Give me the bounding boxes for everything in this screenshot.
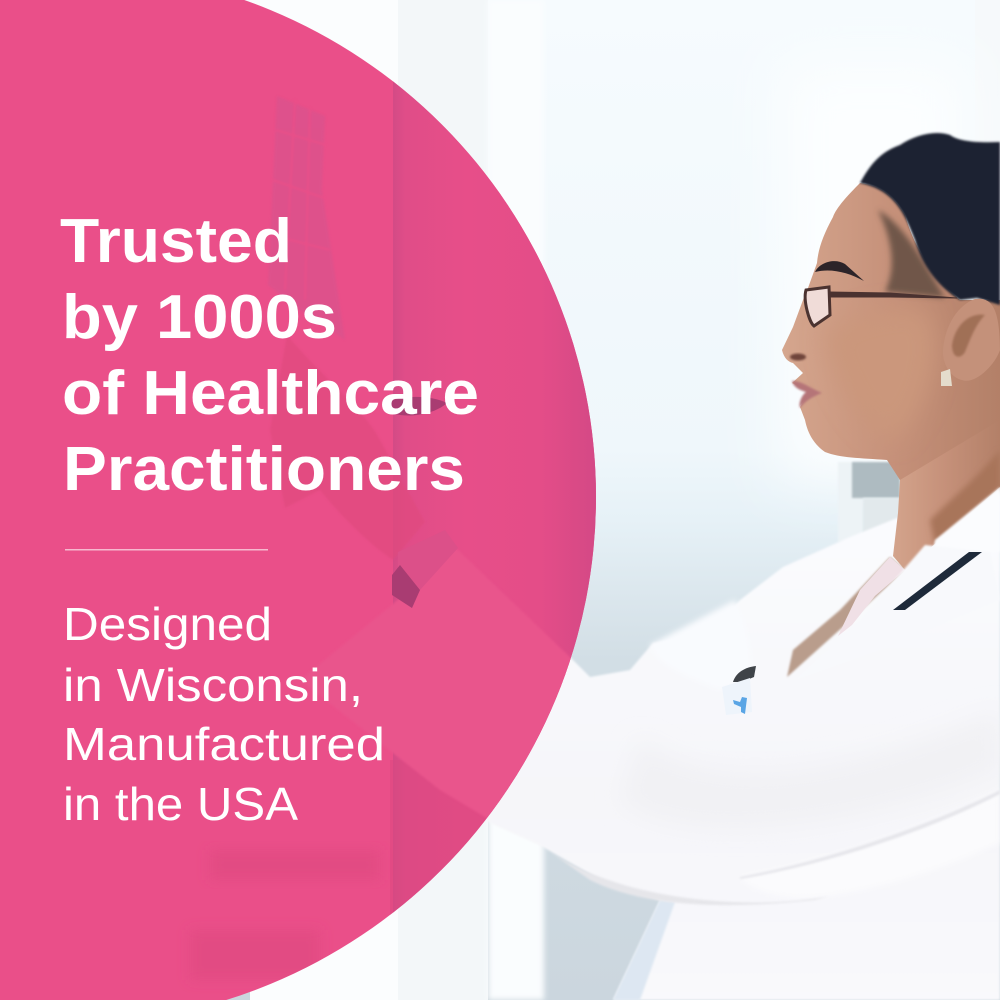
coat [350, 487, 1000, 1000]
heading: Practitioners [63, 435, 465, 504]
heading: of Healthcare [62, 359, 479, 428]
subheading: Designed [63, 598, 272, 650]
sleeve folds [740, 790, 1000, 898]
pink circle panel [0, 0, 596, 1000]
lanyard [893, 552, 982, 610]
earring [941, 369, 952, 386]
ear [943, 299, 1000, 381]
see-through detail under the pink circle [268, 81, 596, 982]
photo: doctor in white coat [350, 133, 1000, 1000]
hand [287, 344, 394, 557]
eyebrow [815, 261, 864, 281]
subheading: in Wisconsin, [63, 659, 363, 711]
divider [65, 549, 268, 550]
darker window band [393, 81, 596, 912]
lips [792, 381, 822, 408]
heading: by 1000s [62, 283, 337, 352]
sleeve [393, 600, 571, 818]
undershirt and scarf [787, 557, 905, 677]
glasses [805, 287, 957, 326]
x-ray film [268, 96, 345, 340]
heading [60, 207, 479, 504]
subheading [63, 598, 385, 830]
subheading: in the USA [63, 778, 298, 830]
nostril [790, 354, 806, 360]
heading: Trusted [60, 207, 292, 276]
face [782, 183, 1000, 480]
hair [860, 133, 1000, 305]
collar and lapel [933, 487, 1000, 553]
badge logo [733, 697, 747, 714]
id badge [722, 678, 752, 715]
id badge strap [733, 666, 756, 682]
neck [887, 385, 1000, 570]
dark reflection [392, 396, 446, 416]
cuff [416, 530, 458, 590]
subheading: Manufactured [63, 718, 385, 770]
